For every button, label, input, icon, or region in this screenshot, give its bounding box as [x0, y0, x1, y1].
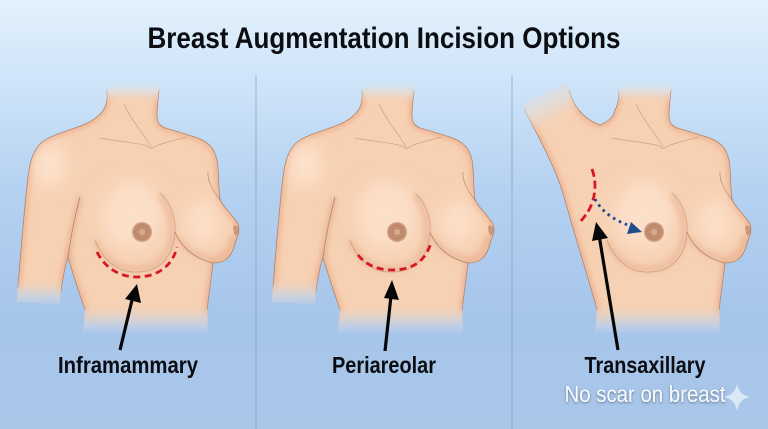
arrow	[384, 280, 399, 351]
incision line	[358, 243, 431, 270]
icon: sparkle	[724, 384, 750, 411]
incision line	[581, 169, 595, 221]
panel: periareolar	[265, 84, 494, 378]
title: Breast Augmentation Incision Options	[148, 22, 620, 55]
dotted route arrow	[595, 199, 642, 234]
dividers	[256, 75, 512, 429]
incision line	[97, 247, 177, 277]
torso with raised arm	[512, 76, 751, 334]
label: Inframammary	[58, 352, 198, 378]
panel: transaxillary	[512, 76, 751, 411]
note: No scar on breast	[564, 381, 726, 407]
arrow	[120, 284, 141, 350]
label: Transaxillary	[584, 352, 706, 378]
label: Periareolar	[332, 352, 436, 378]
torso illustration	[265, 84, 494, 334]
arrow	[592, 222, 618, 350]
panel: inframammary	[10, 84, 239, 378]
torso illustration	[10, 84, 239, 334]
